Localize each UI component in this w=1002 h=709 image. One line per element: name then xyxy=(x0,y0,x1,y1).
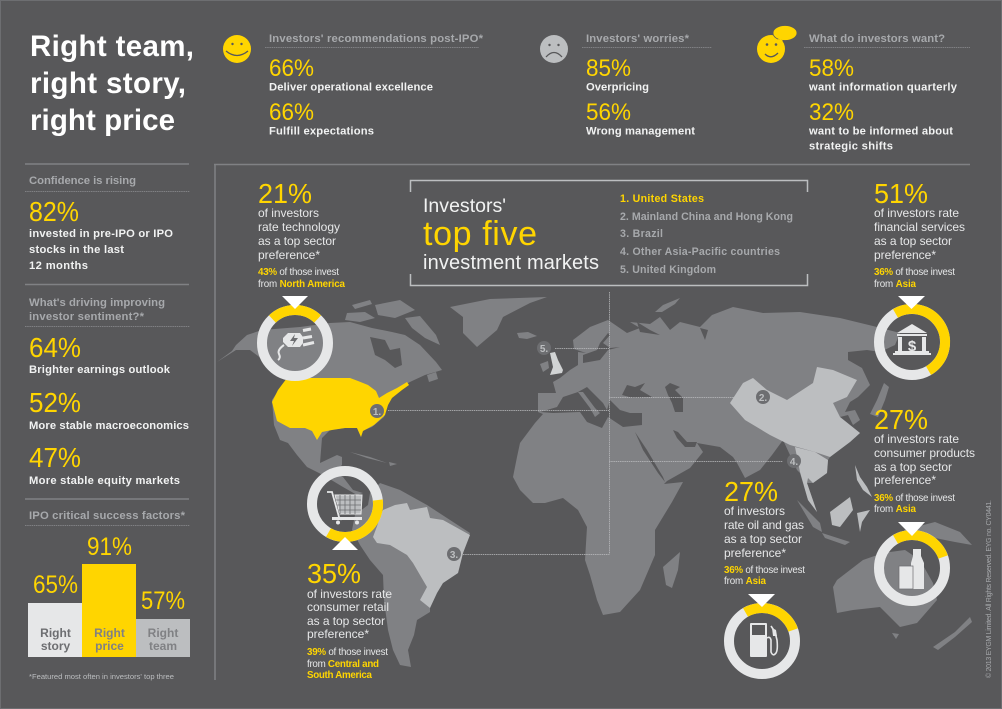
seas and inland water xyxy=(370,322,708,482)
callout: financial services: financial services xyxy=(874,220,965,234)
ranked market list xyxy=(620,193,793,276)
callout: oil and gas: 36% of those invest xyxy=(724,565,805,576)
panel: recommendations post-IPO: 66% xyxy=(269,55,314,82)
icon: plug ring, 21% xyxy=(262,296,328,376)
panel: worries: 56% xyxy=(586,99,631,126)
panel: improving investor sentiment: 47% xyxy=(29,442,81,473)
panel: confidence is rising: stocks in the last xyxy=(29,244,124,256)
panel: confidence is rising: Confidence is rising xyxy=(29,175,136,187)
callout: consumer products: 36% of those invest xyxy=(874,493,955,504)
callout: technology: 43% of those invest xyxy=(258,267,339,278)
panel: confidence is rising xyxy=(29,175,173,272)
panel: improving investor sentiment xyxy=(29,297,189,487)
callout: consumer products: as a top sector xyxy=(874,460,952,474)
panel: recommendations post-IPO: 66% xyxy=(269,99,314,126)
icon: sad smiley xyxy=(540,35,568,63)
panel: worries: Wrong management xyxy=(586,126,695,138)
callout: oil and gas: of investors xyxy=(724,504,785,518)
ranked market list: 4. Other Asia-Pacific countries xyxy=(620,246,780,258)
panel: recommendations post-IPO: Deliver operational excellence xyxy=(269,82,433,94)
callout: financial services: 36% of those invest xyxy=(874,267,955,278)
callout: oil and gas: as a top sector xyxy=(724,532,802,546)
panel: improving investor sentiment: More stable equity markets xyxy=(29,475,180,487)
ranked market list: 3. Brazil xyxy=(620,228,663,240)
panel: confidence is rising: invested in pre-IPO or IPO xyxy=(29,228,173,240)
icon: bank ring, 51%: $ xyxy=(908,338,917,355)
callout: financial services: preference* xyxy=(874,248,936,262)
callout: consumer retail: 35% xyxy=(307,558,361,589)
layout rules xyxy=(25,164,970,680)
callout: financial services: of investors rate xyxy=(874,206,959,220)
icon: fuel pump ring, 27% xyxy=(729,594,795,674)
callout: consumer retail: preference* xyxy=(307,627,369,641)
map marker 3: 3. xyxy=(450,550,458,561)
highlighted country: Mainland China and Hong Kong xyxy=(730,367,860,457)
callout: oil and gas: preference* xyxy=(724,546,786,560)
callout: technology xyxy=(258,178,346,290)
map marker 1 xyxy=(370,404,384,418)
panel: improving investor sentiment: What's driving improving xyxy=(29,297,165,309)
bar chart: success factors: Right xyxy=(94,626,125,640)
panel: IPO critical success factors: *Featured most often in investors' top three xyxy=(29,672,174,681)
world map xyxy=(217,297,972,667)
ranked market list: 1. United States xyxy=(620,193,704,205)
callout: financial services: 51% xyxy=(874,178,928,209)
bar chart: success factors: 57% xyxy=(141,587,185,615)
panel: recommendations post-IPO: Fulfill expectations xyxy=(269,126,374,138)
title xyxy=(30,30,194,137)
ranked market list: 2. Mainland China and Hong Kong xyxy=(620,211,793,223)
callout: consumer retail: South America xyxy=(307,670,373,681)
panel: IPO critical success factors xyxy=(28,510,190,681)
map marker 4: 4. xyxy=(790,457,798,468)
bar chart: success factors: Right xyxy=(40,626,71,640)
panel: recommendations post-IPO xyxy=(269,33,484,138)
panel: what investors want xyxy=(808,33,958,152)
title: Right team, xyxy=(30,30,194,63)
callout: technology: rate technology xyxy=(258,220,340,234)
panel: improving investor sentiment: More stable macroeconomics xyxy=(29,420,189,432)
panel: worries: 85% xyxy=(586,55,631,82)
panel: worries xyxy=(586,33,695,138)
map marker 5: 5. xyxy=(540,344,548,355)
callout: consumer retail: of investors rate xyxy=(307,587,392,601)
callout: technology: of investors xyxy=(258,206,319,220)
callout: technology: from North America xyxy=(258,279,346,290)
callout: consumer products: from Asia xyxy=(874,504,917,515)
callout: technology: preference* xyxy=(258,248,320,262)
callout: consumer retail: 39% of those invest xyxy=(307,647,388,658)
callout: oil and gas: 27% xyxy=(724,476,778,507)
panel: top five investment markets: top five xyxy=(423,215,537,253)
bar chart: success factors: 91% xyxy=(87,533,132,561)
callout: consumer products xyxy=(874,404,975,515)
panel: what investors want: What do investors want? xyxy=(809,33,945,45)
callout: oil and gas: from Asia xyxy=(724,576,767,587)
copyright notice: © 2013 EYGM Limited. All Rights Reserved. EYG no. CY0441. xyxy=(985,500,993,678)
map marker 4 xyxy=(787,454,801,468)
ranked market list: 5. United Kingdom xyxy=(620,264,716,276)
panel: what investors want: strategic shifts xyxy=(809,140,893,152)
bar chart: success factors xyxy=(28,533,190,657)
dotted header rules xyxy=(25,48,970,526)
bar chart: success factors: team xyxy=(149,639,177,653)
leader lines xyxy=(388,292,783,554)
panel: confidence is rising: 82% xyxy=(29,196,79,227)
callout: financial services: as a top sector xyxy=(874,234,952,248)
bar chart: success factors: story xyxy=(41,639,70,653)
callout: financial services xyxy=(874,178,965,290)
title: right price xyxy=(30,104,175,137)
callout: consumer products: 27% xyxy=(874,404,928,435)
panel: what investors want: 58% xyxy=(809,55,854,82)
panel: recommendations post-IPO: Investors' recommendations post-IPO* xyxy=(269,33,484,45)
highlighted country: United States xyxy=(272,378,409,440)
panel: improving investor sentiment: 52% xyxy=(29,387,81,418)
map marker 5 xyxy=(537,341,551,355)
map marker 2 xyxy=(756,390,770,404)
icon: shopping cart ring, 35% xyxy=(312,471,378,550)
bar chart: success factors: 65% xyxy=(33,571,78,599)
panel: improving investor sentiment: investor sentiment?* xyxy=(29,311,145,323)
highlighted region: Other Asia-Pacific countries xyxy=(795,447,872,532)
map marker 3 xyxy=(447,547,461,561)
callout: consumer products: consumer products xyxy=(874,446,975,460)
highlighted country: United Kingdom xyxy=(550,352,563,375)
icon: bottle and carton ring, 27% xyxy=(879,522,945,601)
panel: improving investor sentiment: Brighter earnings outlook xyxy=(29,364,171,376)
panel: worries: Overpricing xyxy=(586,82,649,94)
callout: consumer retail xyxy=(307,558,392,681)
panel: confidence is rising: 12 months xyxy=(29,260,88,272)
callout: financial services: from Asia xyxy=(874,279,917,290)
panel: top five investment markets: investment markets xyxy=(423,252,599,274)
highlighted country: Brazil xyxy=(373,503,470,608)
callout: consumer products: of investors rate xyxy=(874,432,959,446)
callout: consumer retail: consumer retail xyxy=(307,600,389,614)
callout: technology: as a top sector xyxy=(258,234,336,248)
map marker 1: 1. xyxy=(373,407,381,418)
icon: thinking smiley with speech bubble xyxy=(757,26,797,63)
icon: bank ring, 51% xyxy=(879,296,945,375)
callout: oil and gas xyxy=(724,476,805,587)
bar chart: success factors: price xyxy=(95,639,124,653)
panel: improving investor sentiment: 64% xyxy=(29,332,81,363)
callout: consumer products: preference* xyxy=(874,473,936,487)
panel: top five investment markets: Investors' xyxy=(423,195,506,217)
panel: what investors want: want to be informed about xyxy=(808,126,953,138)
callout: consumer retail: from Central and xyxy=(307,659,379,670)
panel: IPO critical success factors: IPO critical success factors* xyxy=(29,510,186,522)
panel: what investors want: 32% xyxy=(809,99,854,126)
icon: happy smiley xyxy=(223,35,251,63)
bar chart: success factors: Right xyxy=(148,626,178,640)
panel: top five investment markets xyxy=(410,180,808,286)
map marker 2: 2. xyxy=(759,393,767,404)
panel: what investors want: want information quarterly xyxy=(808,82,958,94)
title: right story, xyxy=(30,67,186,100)
callout: consumer retail: as a top sector xyxy=(307,614,385,628)
panel: worries: Investors' worries* xyxy=(586,33,690,45)
callout: technology: 21% xyxy=(258,178,312,209)
callout: oil and gas: rate oil and gas xyxy=(724,518,804,532)
